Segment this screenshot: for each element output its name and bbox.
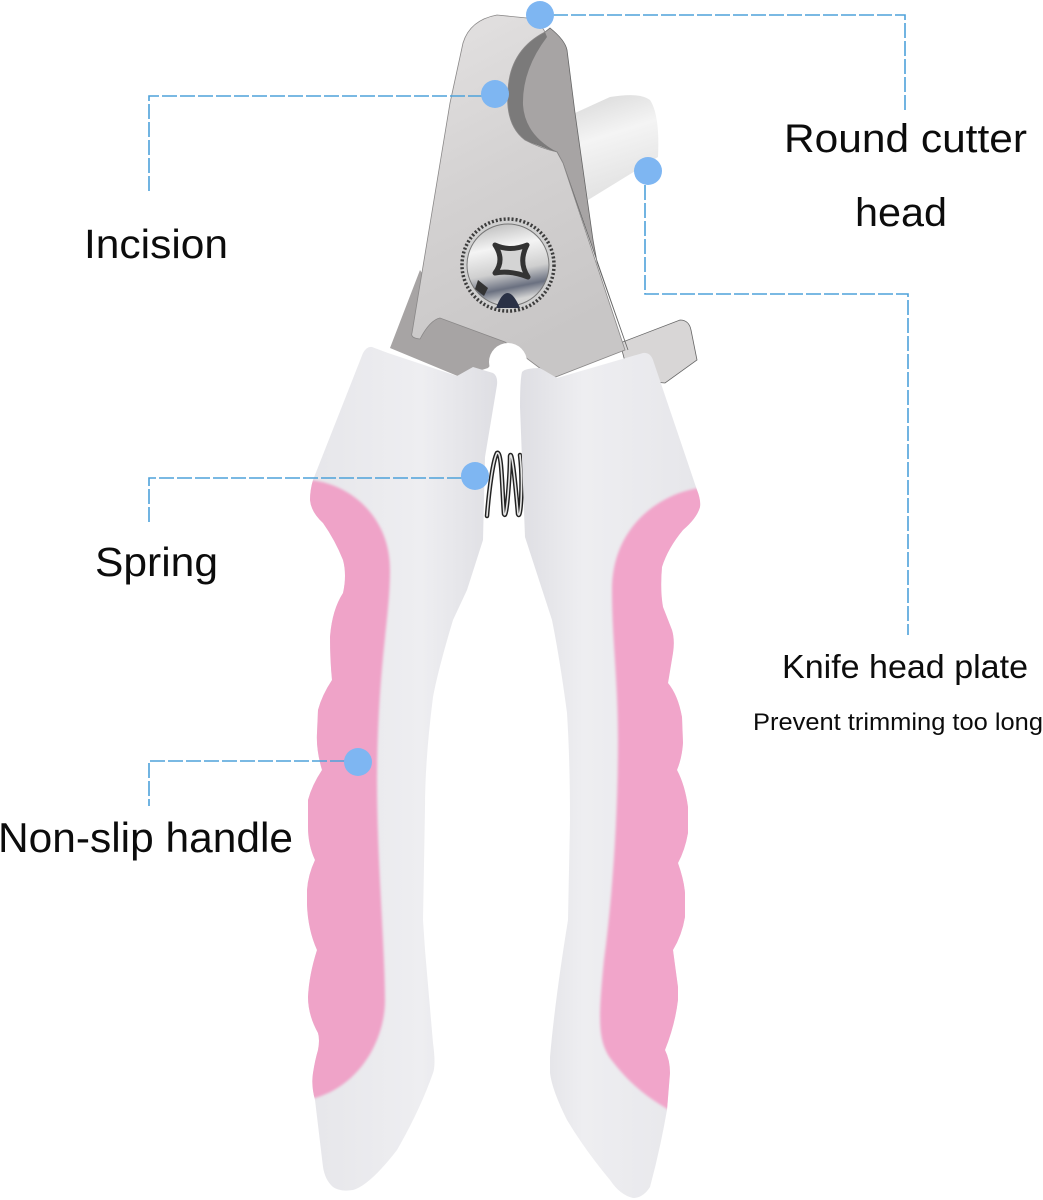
spring — [487, 453, 521, 516]
right handle — [520, 353, 712, 1198]
right handle pink grip — [598, 487, 700, 1110]
left handle white body — [307, 347, 497, 1191]
callout: incision — [84, 80, 509, 267]
upper back blade — [508, 28, 628, 350]
front blade — [412, 15, 625, 378]
left handle pink grip — [307, 479, 392, 1100]
callout: knife head plate — [634, 157, 1043, 736]
marker: spring — [461, 462, 489, 490]
callout: round cutter head — [526, 1, 1027, 235]
right handle white body — [520, 353, 700, 1198]
leader line: round cutter head — [553, 15, 905, 110]
marker: knife head plate — [634, 157, 662, 185]
callout: non-slip handle — [0, 748, 372, 861]
label: round cutter head — [784, 117, 1027, 235]
label: round cutter head: Round cutter — [784, 117, 1027, 161]
label: incision: Incision — [84, 221, 228, 267]
callout: spring — [95, 462, 489, 585]
round cutter head cylinder — [575, 95, 658, 200]
label: round cutter head: head — [855, 191, 947, 235]
label: non-slip handle: Non-slip handle — [0, 814, 293, 861]
pivot screw — [462, 219, 554, 311]
leader line: knife head plate — [645, 185, 908, 635]
marker: incision — [481, 80, 509, 108]
note: prevent trimming too long: Prevent trimming too long — [753, 709, 1043, 736]
leader line: spring — [149, 478, 462, 522]
leader line: incision — [149, 96, 483, 192]
marker: round cutter head — [526, 1, 554, 29]
label: spring: Spring — [95, 539, 218, 585]
gap between handles — [489, 343, 527, 381]
lower back blade — [390, 270, 510, 377]
incision inner curve — [508, 32, 557, 152]
leader line: non-slip handle — [149, 761, 345, 806]
nail clipper illustration — [290, 15, 712, 1198]
marker: non-slip handle — [344, 748, 372, 776]
label: knife head plate: Knife head plate — [782, 648, 1028, 685]
left handle — [290, 347, 497, 1191]
knife head plate tab — [620, 320, 697, 383]
